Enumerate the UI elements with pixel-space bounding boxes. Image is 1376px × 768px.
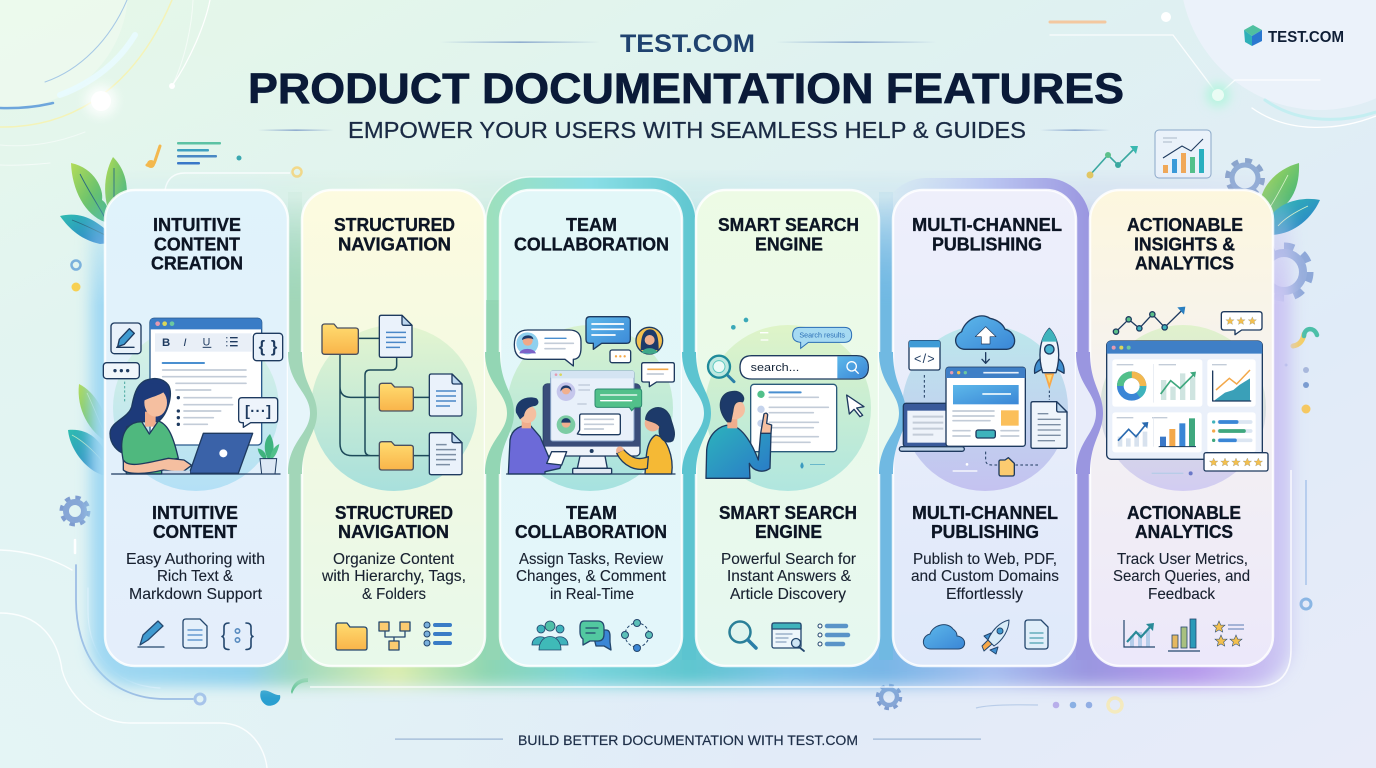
heading: SMART SEARCH — [718, 214, 859, 235]
document middle — [429, 374, 462, 416]
donut chart — [1120, 375, 1143, 397]
illustration: analytics dashboard — [1107, 307, 1268, 475]
subheading — [912, 502, 1058, 542]
braces tile — [253, 333, 283, 361]
heading: MULTI-CHANNEL — [912, 214, 1062, 235]
subheading: COLLABORATION — [515, 521, 667, 542]
illustration backdrop — [113, 325, 279, 491]
subheading — [152, 502, 238, 542]
woman — [616, 408, 674, 474]
icon: search page — [772, 623, 804, 651]
decorative arcs: top left — [0, 0, 210, 165]
trend line — [1113, 307, 1185, 334]
subheading: STRUCTURED — [335, 502, 453, 523]
line with bars — [1118, 422, 1148, 447]
braces tile: { } — [259, 337, 278, 356]
five star rating — [1204, 453, 1268, 471]
blue bubble — [586, 317, 630, 349]
result bubble — [793, 327, 852, 348]
heading — [514, 214, 669, 254]
code window: </> — [914, 352, 935, 366]
gaps between cards — [288, 192, 893, 660]
brand heading rule left — [440, 42, 600, 43]
leaves top right — [1261, 163, 1320, 235]
circuit lines lower left — [0, 540, 267, 768]
subheading: INTUITIVE — [152, 502, 238, 523]
subheading — [515, 502, 667, 542]
icon: team — [532, 621, 568, 650]
illustration backdrop — [705, 325, 871, 491]
folders — [322, 324, 413, 470]
gear bottom centre — [878, 686, 900, 708]
document window: B — [162, 337, 170, 349]
heading: ANALYTICS — [1135, 252, 1234, 274]
illustration: search — [706, 318, 868, 478]
top right decorations — [1086, 130, 1211, 178]
panel: team collaboration — [500, 190, 682, 666]
decorative arcs: top right — [1050, 12, 1376, 127]
description — [516, 551, 667, 603]
description: Article Discovery — [730, 586, 846, 603]
bar chart — [1159, 418, 1196, 447]
code bubble: [···] — [245, 404, 271, 420]
plant — [258, 434, 279, 474]
heading: STRUCTURED — [334, 214, 455, 235]
panel: structured navigation — [302, 190, 485, 666]
man — [508, 397, 567, 474]
icon: list — [424, 622, 450, 646]
monitor — [543, 371, 642, 474]
icon: cloud — [923, 625, 965, 649]
rocket — [1035, 328, 1064, 400]
heading — [334, 214, 455, 254]
heading — [151, 214, 243, 274]
icon: bar chart — [1168, 619, 1200, 651]
footer: BUILD BETTER DOCUMENTATION WITH TEST.COM — [518, 732, 858, 748]
description — [721, 551, 857, 603]
subheading: NAVIGATION — [338, 521, 449, 542]
legend bars — [1212, 420, 1251, 442]
illustration: team chat — [507, 317, 675, 474]
description — [911, 551, 1059, 603]
illustration backdrop — [507, 325, 673, 491]
icon: results list — [818, 624, 848, 646]
search box: search... — [751, 362, 799, 374]
panel: multi-channel publishing — [893, 190, 1076, 666]
subheading: ENGINE — [755, 521, 822, 542]
results panel — [751, 384, 837, 452]
icon row: team collaboration — [532, 620, 652, 652]
panel: smart search engine — [696, 190, 879, 666]
band ring around team collaboration — [486, 177, 696, 477]
swoosh logo bottom — [260, 678, 308, 706]
arrow connector 1 to 2 — [288, 352, 317, 474]
gear lower left — [62, 498, 88, 524]
heading: COLLABORATION — [514, 234, 669, 254]
subtitle rule right — [1040, 130, 1110, 131]
heading: INTUITIVE — [153, 214, 241, 235]
subheading: PUBLISHING — [931, 521, 1039, 542]
description — [321, 551, 466, 603]
description: with Hierarchy, Tags, — [321, 568, 466, 585]
description: & Folders — [362, 586, 426, 603]
icon row: multi-channel publishing — [923, 620, 1048, 654]
illustration backdrop — [902, 325, 1068, 491]
document lower — [429, 433, 462, 475]
heading: INSIGHTS & — [1134, 234, 1235, 254]
band ring around publishing — [882, 178, 1090, 478]
illustration backdrop — [311, 325, 477, 491]
icon row: smart search — [730, 622, 848, 651]
dashboard window — [1107, 341, 1262, 459]
subheading: ACTIONABLE — [1127, 502, 1241, 523]
illustrations, drawn at 3x and scaled down — [103, 315, 462, 475]
right decorations — [1284, 329, 1317, 609]
scroll hint — [801, 463, 825, 468]
panel: intuitive content — [105, 190, 288, 666]
pagination — [1152, 471, 1193, 475]
icon: star ratings — [1213, 621, 1244, 646]
ground line — [507, 472, 675, 476]
result bubble: Search results — [799, 332, 846, 339]
cloud upload — [956, 316, 1015, 363]
heading — [1127, 214, 1243, 274]
icon: braces — [222, 623, 253, 650]
dots bubble — [103, 363, 139, 402]
icon: document — [1025, 620, 1048, 649]
description: Assign Tasks, Review — [519, 551, 663, 568]
code window — [909, 341, 940, 400]
logo — [1244, 25, 1344, 46]
description: Changes, & Comment — [516, 568, 667, 585]
subheading: MULTI-CHANNEL — [912, 502, 1058, 523]
description: Organize Content — [333, 551, 455, 568]
area chart — [1213, 370, 1251, 401]
heading: CREATION — [151, 252, 243, 274]
ground line — [112, 472, 280, 476]
heading: ACTIONABLE — [1127, 214, 1243, 235]
icon: pencil — [138, 621, 164, 647]
heading — [718, 214, 859, 254]
decoration dots — [731, 318, 768, 340]
three star bubble — [1221, 312, 1262, 335]
arrow connector 4 to 5 — [879, 352, 906, 474]
description: Publish to Web, PDF, — [913, 551, 1057, 568]
description: Track User Metrics, — [1117, 551, 1248, 568]
icon: line chart — [1124, 620, 1155, 647]
panel: actionable analytics — [1090, 190, 1273, 666]
heading: CONTENT — [154, 234, 241, 254]
laptop — [899, 403, 964, 451]
arrow connector 2 to 3 — [485, 352, 514, 474]
cursor — [847, 395, 864, 417]
description: and Custom Domains — [911, 568, 1059, 585]
brand heading: TEST.COM — [620, 30, 755, 58]
description: Feedback — [1148, 586, 1216, 603]
illustration: author at laptop — [103, 318, 283, 474]
subheading: ANALYTICS — [1135, 521, 1233, 542]
logo: TEST.COM — [1268, 29, 1344, 46]
subheading — [719, 502, 857, 542]
subheading — [335, 502, 453, 542]
pencil tile — [111, 323, 141, 354]
description: Instant Answers & — [727, 568, 851, 585]
document window: U — [203, 336, 210, 348]
heading: TEAM — [566, 214, 617, 235]
description: Easy Authoring with — [126, 551, 265, 568]
typing bubble — [610, 350, 631, 363]
gear top right — [1228, 161, 1262, 195]
search box — [740, 356, 868, 379]
description — [1113, 551, 1250, 603]
icon: rocket — [982, 620, 1009, 654]
illustration: folder tree — [322, 315, 462, 475]
gear right — [1259, 247, 1309, 297]
woman with laptop — [110, 379, 253, 474]
subtitle: EMPOWER YOUR USERS WITH SEAMLESS HELP & GUIDES — [348, 117, 1026, 143]
document window — [150, 318, 262, 445]
band outline right — [310, 470, 1291, 687]
code bubble — [239, 398, 278, 427]
icon: document — [183, 619, 207, 648]
description: Effortlessly — [946, 586, 1023, 603]
subheading: TEAM — [566, 502, 617, 523]
illustration backdrop — [1100, 325, 1266, 491]
leaves top left — [60, 157, 127, 244]
icon: chat — [580, 621, 611, 650]
brand heading rule right — [776, 42, 936, 43]
leaves lower left — [68, 384, 107, 476]
searching person — [706, 391, 772, 478]
upload trail — [953, 452, 1038, 476]
heading: ENGINE — [755, 234, 823, 254]
description: in Real-Time — [550, 586, 634, 603]
icon: hierarchy — [379, 622, 410, 650]
document top — [379, 315, 412, 357]
woman avatar — [636, 327, 663, 354]
subheading: CONTENT — [153, 521, 238, 542]
chat bubble with avatar — [514, 330, 581, 366]
magnifier — [708, 356, 734, 382]
document — [1031, 402, 1067, 448]
icon row: actionable analytics — [1124, 619, 1244, 651]
arrow connector 3 to 4 — [682, 352, 711, 474]
orange bubble — [642, 363, 674, 387]
icon row: structured navigation — [336, 622, 450, 650]
subheading: SMART SEARCH — [719, 502, 857, 523]
description: Rich Text & — [157, 568, 233, 585]
top left decorations — [72, 142, 302, 292]
arrow connector 5 to 6 — [1076, 352, 1103, 474]
description: Markdown Support — [129, 586, 263, 603]
bars and trend — [1161, 372, 1196, 400]
document window: I — [183, 337, 187, 349]
description — [126, 551, 265, 603]
description: Search Queries, and — [1113, 568, 1250, 585]
icon row: intuitive content — [138, 619, 253, 650]
icon: folder — [336, 623, 367, 650]
description: Powerful Search for — [721, 551, 857, 568]
icon: workflow circle — [622, 620, 652, 652]
title: PRODUCT DOCUMENTATION FEATURES — [248, 65, 1124, 113]
coloured band behind cards — [90, 178, 1292, 686]
subheading — [1127, 502, 1241, 542]
heading — [912, 214, 1062, 254]
heading: NAVIGATION — [338, 234, 451, 254]
icon: magnifier — [730, 622, 756, 648]
web page window — [946, 367, 1025, 446]
bottom right dots — [976, 698, 1122, 712]
subtitle rule left — [258, 130, 334, 131]
illustration: publishing — [899, 316, 1067, 476]
heading: PUBLISHING — [932, 234, 1042, 254]
